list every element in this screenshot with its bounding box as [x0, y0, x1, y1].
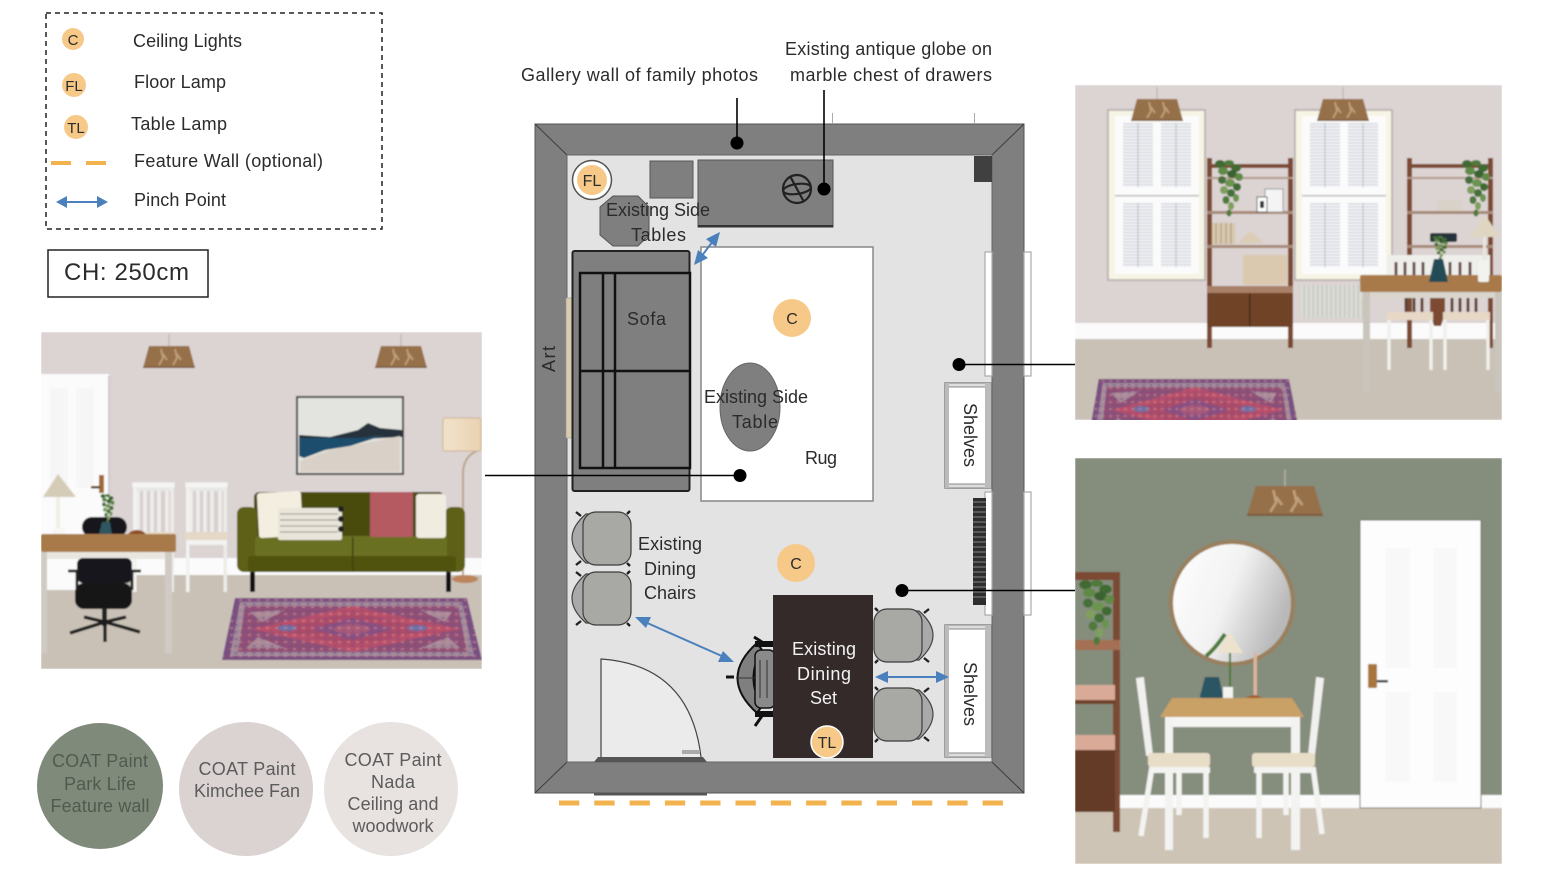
legend: pinch point	[56, 190, 226, 210]
swatch: nada: Nada	[371, 772, 416, 792]
swatch: kimchee fan: Kimchee Fan	[194, 781, 300, 801]
sofa: Sofa	[627, 309, 667, 329]
panel: bottom right elevation, feature wall	[1075, 458, 1502, 864]
desk chair back	[82, 517, 127, 537]
legend: ceiling lights: Ceiling Lights	[133, 31, 242, 51]
spare dining chairs	[572, 511, 702, 626]
pinch arrow top	[694, 232, 720, 265]
side tables label: Existing Side	[606, 200, 710, 220]
table and accessories	[1359, 216, 1502, 340]
swatch: nada: woodwork	[352, 816, 434, 836]
rug	[222, 598, 482, 660]
window openings	[985, 252, 1031, 615]
legend: floor lamp	[62, 72, 226, 97]
door	[1360, 520, 1481, 808]
rug label: Rug	[805, 448, 837, 468]
pendant	[1247, 470, 1323, 516]
gallery wall marker	[730, 98, 744, 150]
label: antique globe	[785, 39, 992, 85]
spare dining chairs: Dining	[644, 559, 696, 579]
radiator	[973, 498, 986, 605]
legend: floor lamp: FL	[65, 78, 83, 95]
feature wall dashes	[559, 800, 1005, 806]
artwork	[297, 397, 403, 474]
marker line: feature wall view	[896, 584, 1075, 597]
existing side table	[704, 363, 808, 451]
floor lamp marker: FL	[583, 173, 601, 190]
shelving unit 1	[1207, 158, 1293, 348]
legend: ceiling lights: C	[68, 32, 79, 49]
shelves lower	[945, 625, 991, 757]
shelves upper: Shelves	[960, 403, 980, 467]
marker line: window view	[952, 358, 1075, 371]
ceiling light 2: C	[790, 556, 802, 573]
label: antique globe: Existing antique globe on	[785, 39, 992, 59]
pinch arrow right	[875, 671, 949, 683]
desk	[41, 534, 176, 653]
panel: left elevation, sofa wall	[41, 332, 482, 669]
swatch: nada	[324, 722, 458, 856]
ceiling height box	[48, 250, 208, 297]
legend: pinch point: Pinch Point	[134, 190, 226, 210]
dining chairs	[1387, 255, 1490, 370]
shelves lower: Shelves	[960, 662, 980, 726]
spare dining chairs: Existing	[638, 534, 702, 554]
dining table	[1160, 698, 1304, 850]
dining table: TL	[818, 735, 836, 752]
shelving unit 2	[1407, 158, 1493, 348]
swatch: nada: COAT Paint	[344, 750, 442, 770]
shelving unit	[1075, 572, 1120, 832]
art	[539, 298, 572, 438]
shelves upper	[945, 383, 991, 488]
dining table	[773, 595, 873, 758]
floor plan	[485, 90, 1075, 803]
swatch: park life: Park Life	[64, 774, 136, 794]
dining table: Dining	[797, 664, 851, 684]
legend: feature wall: Feature Wall (optional)	[134, 151, 323, 171]
existing side table: Table	[732, 412, 778, 432]
legend	[46, 13, 382, 229]
floor lamp	[443, 418, 481, 583]
swatch: kimchee fan	[179, 722, 313, 856]
antique globe	[782, 175, 812, 203]
swatch: kimchee fan: COAT Paint	[198, 759, 296, 779]
art: Art	[539, 346, 559, 372]
side tables label	[606, 200, 710, 245]
marble chest of drawers	[698, 160, 833, 228]
dining table: Existing	[792, 639, 856, 659]
door	[41, 374, 110, 590]
legend: table lamp: TL	[67, 120, 85, 137]
dining chairs	[132, 482, 175, 592]
side tables label: Tables	[631, 225, 686, 245]
ceiling height box: CH: 250cm	[64, 259, 189, 286]
swatch: park life: Feature wall	[50, 796, 150, 816]
square side table	[650, 161, 693, 198]
window 2	[1295, 110, 1392, 280]
office chair	[68, 558, 141, 642]
legend: table lamp: Table Lamp	[131, 114, 227, 134]
swatch: park life	[37, 723, 163, 849]
marker line: sofa view	[485, 469, 746, 482]
globe marker	[818, 90, 830, 196]
legend: floor lamp: Floor Lamp	[134, 72, 226, 92]
label: antique globe: marble chest of drawers	[790, 65, 992, 85]
dining table: Set	[810, 688, 837, 708]
existing side table: Existing Side	[704, 387, 808, 407]
panel: top right elevation, window wall	[1075, 85, 1502, 441]
radiator	[1300, 285, 1363, 318]
cushions	[257, 491, 446, 540]
dining chair left	[1137, 678, 1210, 838]
dining chair right	[1252, 678, 1323, 838]
swatch: nada: Ceiling and	[348, 794, 438, 814]
door swing	[594, 659, 707, 796]
legend: ceiling lights	[62, 28, 242, 51]
label: gallery wall: Gallery wall of family photos	[521, 65, 758, 85]
sofa	[572, 251, 690, 491]
walls	[535, 113, 1024, 793]
mirror	[1171, 542, 1293, 664]
legend: table lamp	[64, 114, 227, 139]
chimney corner	[974, 156, 992, 182]
sofa	[237, 492, 465, 592]
pinch arrow left	[635, 617, 734, 662]
rug	[1090, 378, 1298, 420]
head chair	[726, 637, 775, 726]
table lamp and accessories	[43, 474, 146, 542]
octagonal side table	[600, 196, 649, 246]
ceiling light 2	[777, 544, 815, 582]
swatch: park life: COAT Paint	[52, 751, 148, 771]
accessories	[1200, 632, 1262, 699]
dining set chairs	[874, 608, 933, 742]
floor lamp marker	[572, 160, 612, 200]
spare dining chairs: Chairs	[644, 583, 696, 603]
window 1	[1108, 110, 1205, 280]
ceiling light 1	[773, 299, 811, 337]
ceiling light 1: C	[786, 311, 798, 328]
rug	[701, 247, 873, 501]
